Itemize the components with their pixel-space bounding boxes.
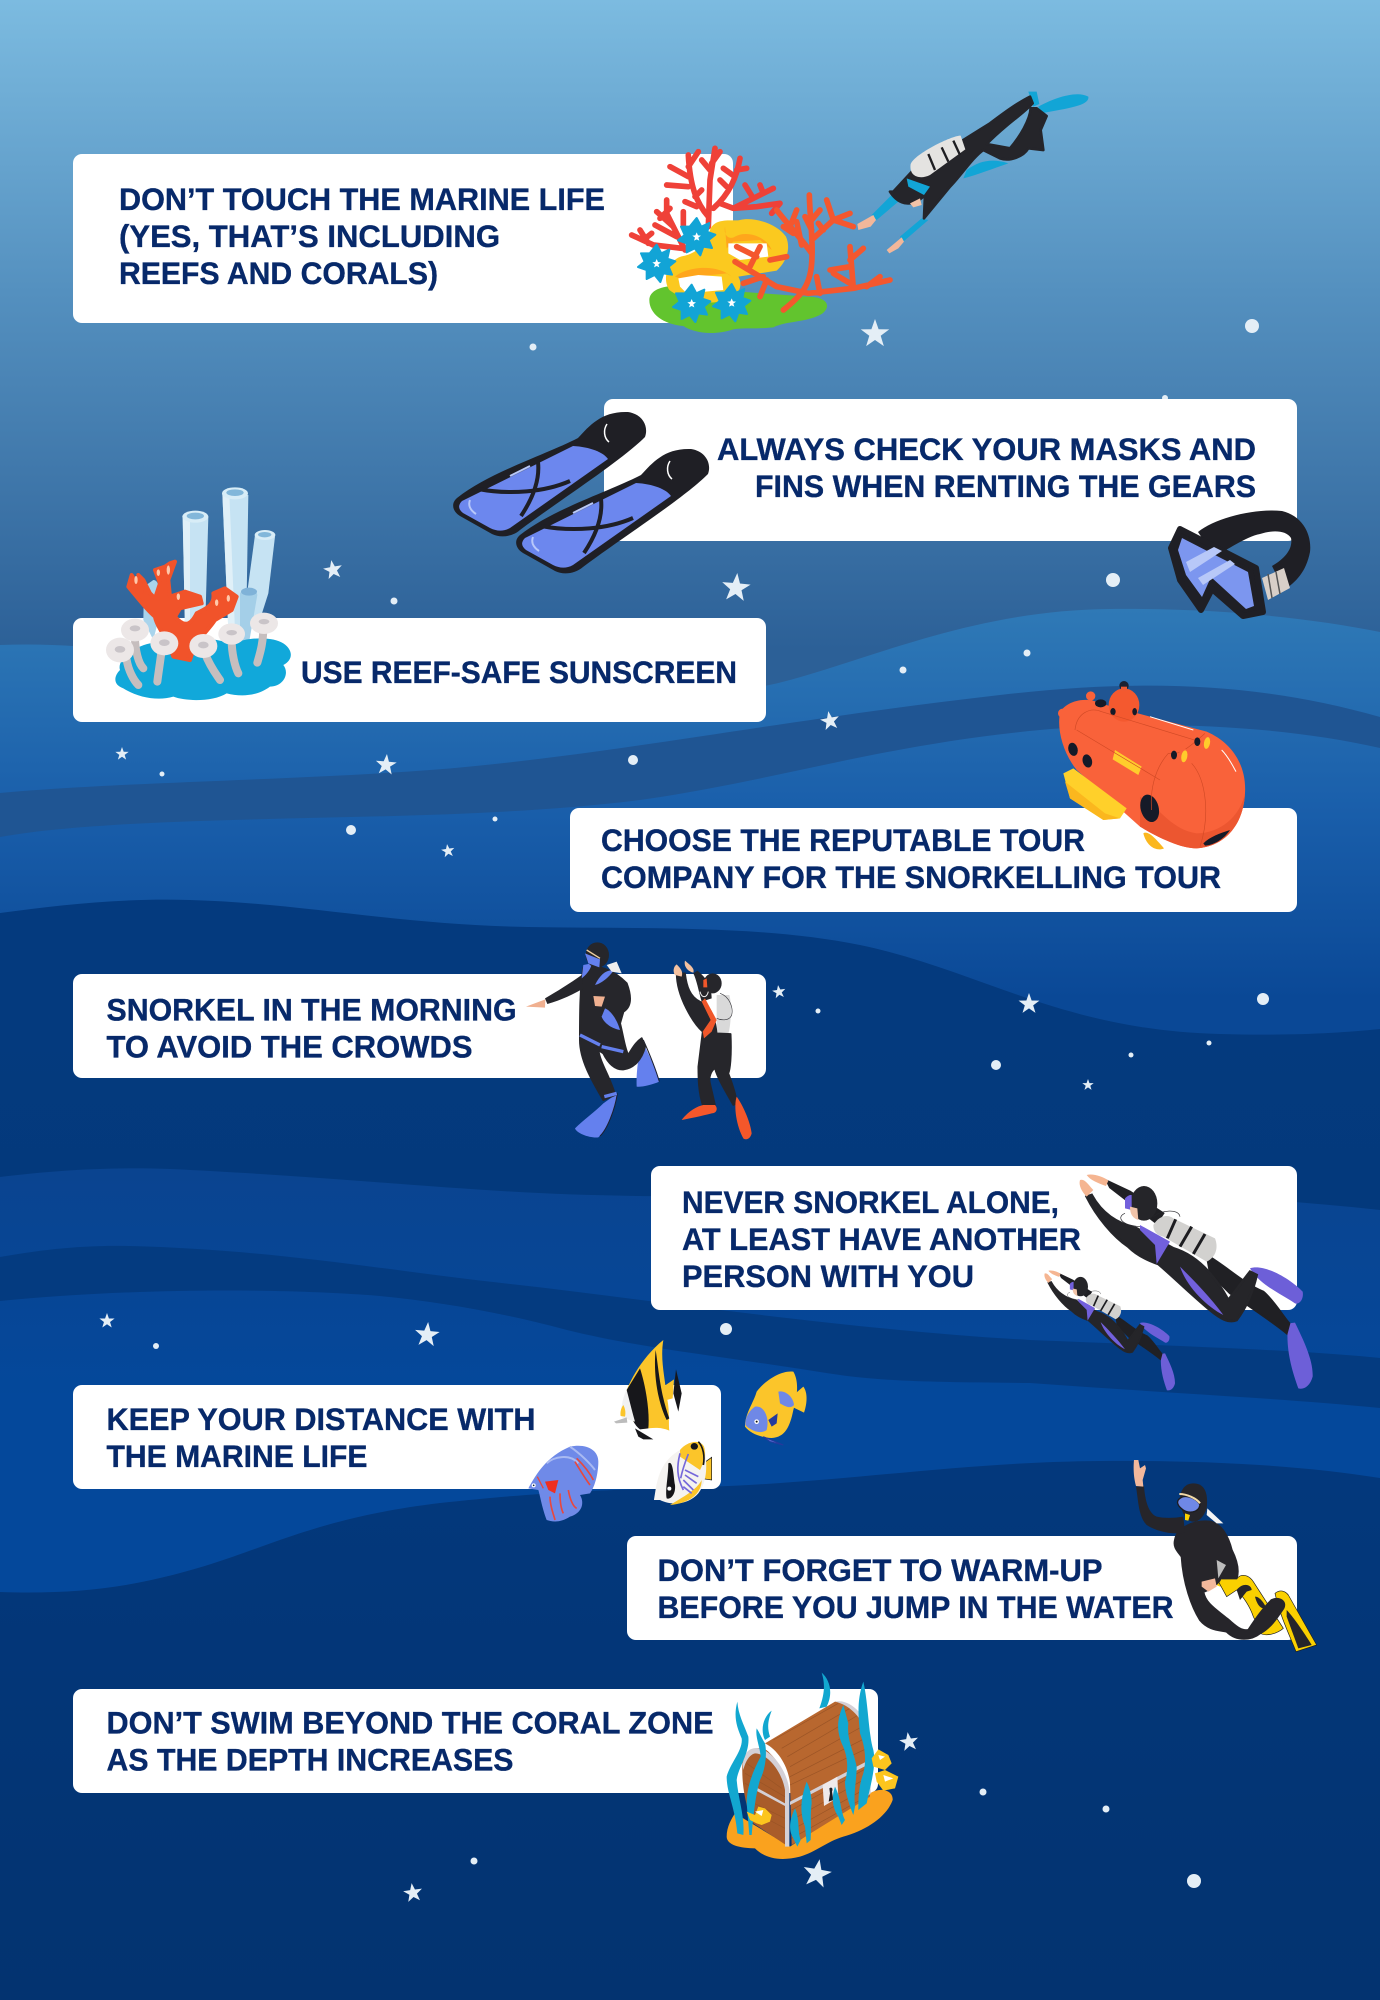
bubbles and stars bbox=[99, 319, 1269, 1902]
panel: never snorkel alone: PERSON WITH YOU bbox=[682, 1258, 974, 1294]
panel: reputable tour company: COMPANY FOR THE SNORKELLING TOUR bbox=[601, 859, 1221, 895]
icon: two divers with purple fins bbox=[1044, 1175, 1313, 1390]
panel: check masks and fins: FINS WHEN RENTING THE GEARS bbox=[755, 468, 1256, 504]
icon: diving mask bbox=[1171, 510, 1310, 616]
panel: don't touch marine life: REEFS AND CORALS) bbox=[119, 255, 438, 291]
panel: reef-safe sunscreen: USE REEF-SAFE SUNSCREEN bbox=[301, 654, 737, 690]
panel: don't touch marine life bbox=[73, 154, 733, 323]
panel: keep your distance: THE MARINE LIFE bbox=[106, 1438, 368, 1474]
icon: orange submarine bbox=[1058, 681, 1245, 849]
icon: waving diver with yellow fins bbox=[1134, 1460, 1317, 1652]
icon: two divers bbox=[526, 942, 752, 1139]
panel: coral zone: DON’T SWIM BEYOND THE CORAL ZONE bbox=[106, 1704, 714, 1740]
panel: don't touch marine life: (YES, THAT’S INCLUDING bbox=[119, 218, 500, 254]
panel: keep your distance bbox=[73, 1385, 721, 1489]
panel: warm-up: DON’T FORGET TO WARM-UP bbox=[658, 1552, 1102, 1588]
icon: coral cluster bbox=[632, 148, 890, 333]
panel: check masks and fins: ALWAYS CHECK YOUR MASKS AND bbox=[717, 431, 1256, 467]
icon: pair of fins bbox=[453, 412, 709, 573]
panel: check masks and fins bbox=[604, 399, 1297, 541]
panel: keep your distance: KEEP YOUR DISTANCE WITH bbox=[106, 1401, 536, 1437]
panel: warm-up: BEFORE YOU JUMP IN THE WATER bbox=[658, 1589, 1174, 1625]
icon: sponge and coral bbox=[106, 487, 291, 700]
panel: don't touch marine life: DON’T TOUCH THE MARINE LIFE bbox=[119, 181, 605, 217]
panel: snorkel in the morning: TO AVOID THE CROWDS bbox=[106, 1028, 472, 1064]
icon: tropical fish bbox=[528, 1340, 807, 1521]
panel: never snorkel alone bbox=[651, 1166, 1297, 1310]
wave layers bbox=[0, 609, 1380, 2000]
panel: coral zone: AS THE DEPTH INCREASES bbox=[106, 1742, 514, 1778]
panel: never snorkel alone: NEVER SNORKEL ALONE, bbox=[682, 1184, 1059, 1220]
panel: snorkel in the morning: SNORKEL IN THE MORNING bbox=[106, 992, 516, 1028]
panel: reputable tour company: CHOOSE THE REPUTABLE TOUR bbox=[601, 822, 1085, 858]
icon: diver near coral bbox=[857, 92, 1088, 253]
panel: coral zone bbox=[73, 1689, 878, 1793]
panel: snorkel in the morning bbox=[73, 974, 766, 1078]
panel: reef-safe sunscreen bbox=[73, 618, 766, 722]
panel: reputable tour company bbox=[570, 808, 1297, 912]
panel: warm-up bbox=[627, 1536, 1297, 1640]
panel: never snorkel alone: AT LEAST HAVE ANOTHER bbox=[682, 1221, 1081, 1257]
icon: treasure chest with seaweed bbox=[727, 1673, 898, 1859]
ocean background bbox=[0, 0, 1380, 800]
